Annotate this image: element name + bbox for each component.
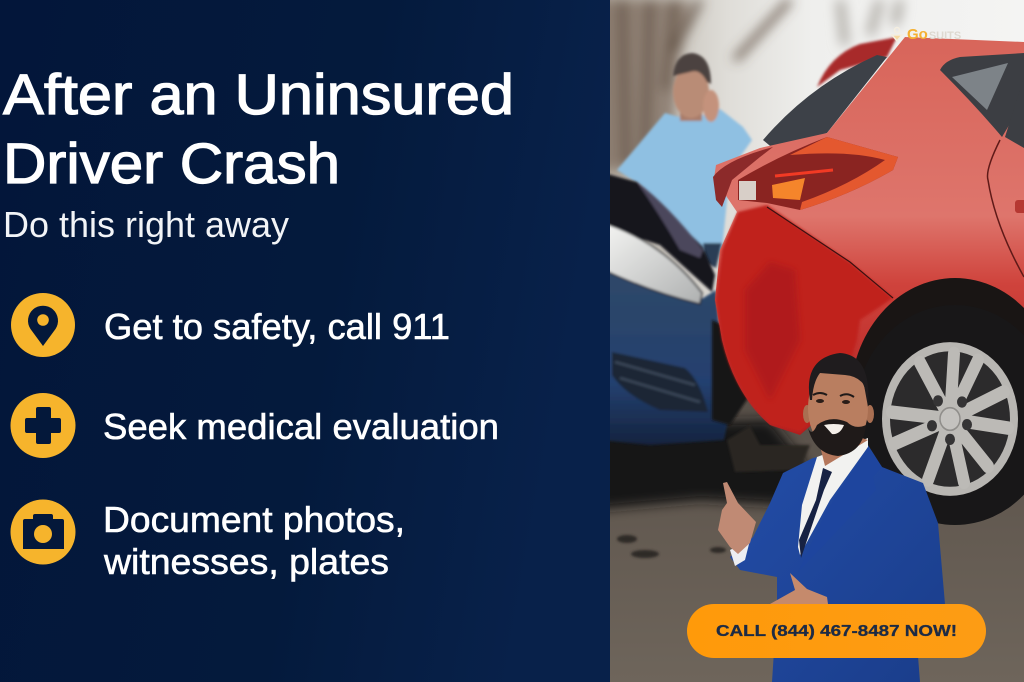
icon: camera bbox=[10, 500, 76, 564]
car front bbox=[600, 268, 728, 445]
ears bbox=[803, 405, 874, 423]
jacket bbox=[730, 445, 945, 682]
shirt bbox=[798, 438, 868, 555]
door seam bbox=[988, 140, 1024, 277]
spoiler bbox=[817, 37, 897, 87]
step: medical evaluation bbox=[10, 393, 499, 458]
wheel arch bbox=[850, 278, 1024, 522]
panel: crash photo bbox=[590, 0, 1024, 682]
smile bbox=[824, 424, 844, 434]
lawyer portrait bbox=[718, 353, 945, 682]
sweater bbox=[617, 109, 752, 255]
step: document the scene bbox=[10, 499, 405, 582]
blue car bbox=[600, 172, 728, 445]
eyes bbox=[816, 399, 850, 404]
rear wheel bbox=[855, 305, 1024, 525]
crash debris bbox=[712, 320, 810, 472]
spokes bbox=[892, 353, 1008, 482]
call to action button bbox=[687, 604, 986, 658]
step: get to safety bbox=[11, 293, 450, 357]
side window bbox=[940, 53, 1024, 137]
bumper shading bbox=[745, 262, 800, 400]
hair bbox=[809, 353, 868, 407]
pointing hand bbox=[718, 482, 756, 554]
step text: Document photos, bbox=[103, 499, 405, 540]
rim bbox=[882, 342, 1018, 496]
step text: Get to safety, call 911 bbox=[104, 306, 450, 347]
bare trees bbox=[590, 0, 900, 170]
second window bbox=[1005, 77, 1024, 148]
tie bbox=[799, 468, 832, 558]
red car bbox=[713, 37, 1024, 522]
icon: medical cross bbox=[10, 393, 76, 458]
title: Driver Crash bbox=[3, 132, 340, 196]
step text: witnesses, plates bbox=[103, 541, 389, 582]
trousers bbox=[703, 243, 722, 268]
raised bonnet underside bbox=[600, 172, 715, 292]
logo emblem bbox=[892, 28, 902, 41]
lower hand bbox=[770, 573, 828, 604]
panel: navy text panel bbox=[0, 0, 610, 682]
neck bbox=[818, 438, 868, 466]
eyebrows bbox=[813, 393, 854, 397]
trunk lip bbox=[713, 147, 773, 207]
road surface bbox=[600, 390, 1024, 682]
bonnet edge bbox=[637, 182, 703, 258]
road stains bbox=[617, 535, 726, 558]
button text: CALL (844) 467-8487 NOW! bbox=[716, 623, 957, 640]
headlight bbox=[600, 223, 702, 304]
neck bbox=[680, 105, 702, 121]
rear window bbox=[763, 55, 887, 150]
step text bbox=[103, 499, 405, 582]
wrapped rear bumper bbox=[716, 205, 893, 432]
step text: Seek medical evaluation bbox=[103, 406, 499, 447]
logo: GoSuits watermark bbox=[892, 26, 961, 43]
logo wordmark: GoSUITS bbox=[907, 26, 961, 43]
title: After an Uninsured bbox=[3, 63, 514, 127]
tail light bbox=[738, 137, 898, 210]
window glass bbox=[952, 63, 1008, 110]
body bbox=[714, 37, 1024, 435]
bumper grille bbox=[612, 352, 708, 412]
head bbox=[673, 66, 709, 118]
dark shadow under cars bbox=[590, 420, 810, 510]
lapel bbox=[798, 447, 882, 572]
hand bbox=[703, 90, 719, 122]
title bbox=[3, 63, 514, 196]
hair bbox=[673, 53, 711, 84]
beard bbox=[808, 419, 866, 456]
face bbox=[808, 364, 868, 452]
tyre bbox=[855, 305, 1024, 525]
icon: location pin bbox=[11, 293, 75, 357]
man on phone bbox=[617, 53, 752, 268]
shirt cuff bbox=[730, 540, 750, 566]
door handle bbox=[1015, 200, 1024, 213]
subtitle: Do this right away bbox=[3, 204, 289, 245]
crease line bbox=[767, 207, 893, 298]
